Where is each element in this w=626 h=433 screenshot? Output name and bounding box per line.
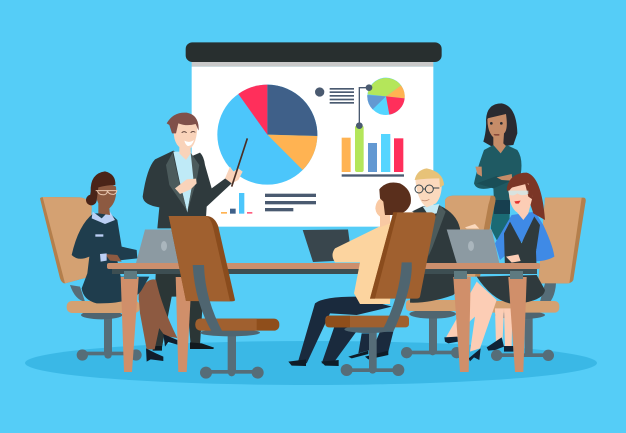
blond man with chair: [401, 168, 496, 358]
shirt collar: [423, 204, 439, 215]
man head: [375, 198, 390, 217]
dark laptop: [303, 230, 352, 262]
hair: [167, 113, 199, 133]
glasses: [96, 191, 117, 195]
jacket: [143, 151, 232, 228]
pole and base: [200, 333, 264, 379]
seated woman left with chair: [40, 171, 177, 362]
floor shadow: [25, 341, 597, 385]
gesturing hand: [175, 179, 197, 194]
hair fringe: [507, 178, 533, 200]
skirt: [491, 200, 510, 243]
seat: [325, 316, 409, 327]
seat: [195, 319, 279, 331]
hair back: [483, 103, 517, 147]
near chair left: [169, 216, 279, 379]
lapels: [166, 153, 199, 212]
shoes: [153, 342, 214, 351]
text lines: [265, 194, 316, 211]
hair: [415, 168, 444, 187]
man shoes: [288, 351, 388, 366]
bar chart: [342, 122, 404, 177]
skirt and jacket: [72, 213, 149, 303]
laptops: [136, 230, 499, 263]
chair support: [540, 283, 556, 307]
chair back: [445, 196, 496, 277]
back: [169, 216, 235, 301]
pointing hand: [225, 167, 243, 183]
cuff and hand: [100, 253, 122, 262]
chair base: [77, 349, 142, 361]
standing presenter man: [143, 113, 247, 351]
head: [174, 120, 197, 160]
smile and eyes: [182, 132, 195, 146]
jacket and trousers: [410, 205, 460, 303]
name badge: [95, 234, 103, 237]
hair fringe: [486, 105, 513, 123]
skirt: [477, 275, 545, 304]
blue collar: [513, 212, 535, 243]
arm support: [382, 262, 412, 332]
belt: [494, 200, 510, 214]
near chair right: [325, 212, 436, 376]
arm support: [193, 265, 223, 333]
crossed hands: [475, 167, 513, 181]
back-turned man: [288, 182, 411, 366]
neck and face: [96, 184, 116, 215]
chair seat: [67, 301, 140, 313]
crossed arm shade: [477, 176, 513, 188]
man trousers: [298, 297, 393, 364]
hand on table: [465, 224, 479, 229]
blue sleeves and shirt: [495, 212, 554, 262]
collar: [92, 211, 115, 224]
table legs: [121, 277, 527, 372]
board screen: [192, 62, 433, 227]
seated woman right with chair: [444, 173, 586, 361]
hair: [86, 171, 115, 205]
shoes: [444, 337, 513, 361]
leg brackets: [124, 271, 523, 279]
trousers: [153, 267, 205, 347]
mouth: [422, 199, 429, 201]
head: [415, 177, 442, 207]
man torso and arm: [332, 220, 393, 304]
face: [509, 183, 533, 220]
board roller: [186, 42, 442, 62]
small bar chart: [221, 193, 252, 214]
glasses: [415, 185, 439, 193]
shirt: [173, 152, 196, 213]
eyes: [490, 122, 503, 136]
glasses and lips: [508, 191, 528, 204]
connector line: [359, 84, 372, 126]
conference table: [107, 263, 540, 274]
torso: [474, 145, 521, 202]
pole and base: [341, 330, 404, 376]
chair back: [538, 198, 586, 283]
chair seat: [406, 300, 459, 311]
presentation board: [186, 42, 442, 227]
hand: [506, 254, 521, 263]
silver laptop left: [136, 230, 178, 263]
man hair: [379, 182, 411, 215]
pointer: [232, 138, 247, 187]
chair pole and base: [401, 313, 462, 358]
shoes: [146, 334, 177, 362]
standing woman: [474, 103, 521, 243]
chair seat: [487, 301, 559, 313]
legs: [446, 282, 512, 352]
hair back: [507, 173, 545, 220]
chair support: [70, 285, 112, 354]
neck and face: [487, 114, 507, 154]
legs: [139, 279, 177, 349]
small pie chart: [367, 78, 405, 115]
man neck: [380, 210, 390, 227]
silver laptop right: [447, 230, 499, 263]
legend dot and lines: [315, 87, 354, 104]
vest: [504, 215, 540, 270]
lapel: [428, 205, 446, 257]
large pie chart: [217, 85, 317, 185]
chair back: [40, 197, 92, 283]
back: [370, 212, 436, 299]
